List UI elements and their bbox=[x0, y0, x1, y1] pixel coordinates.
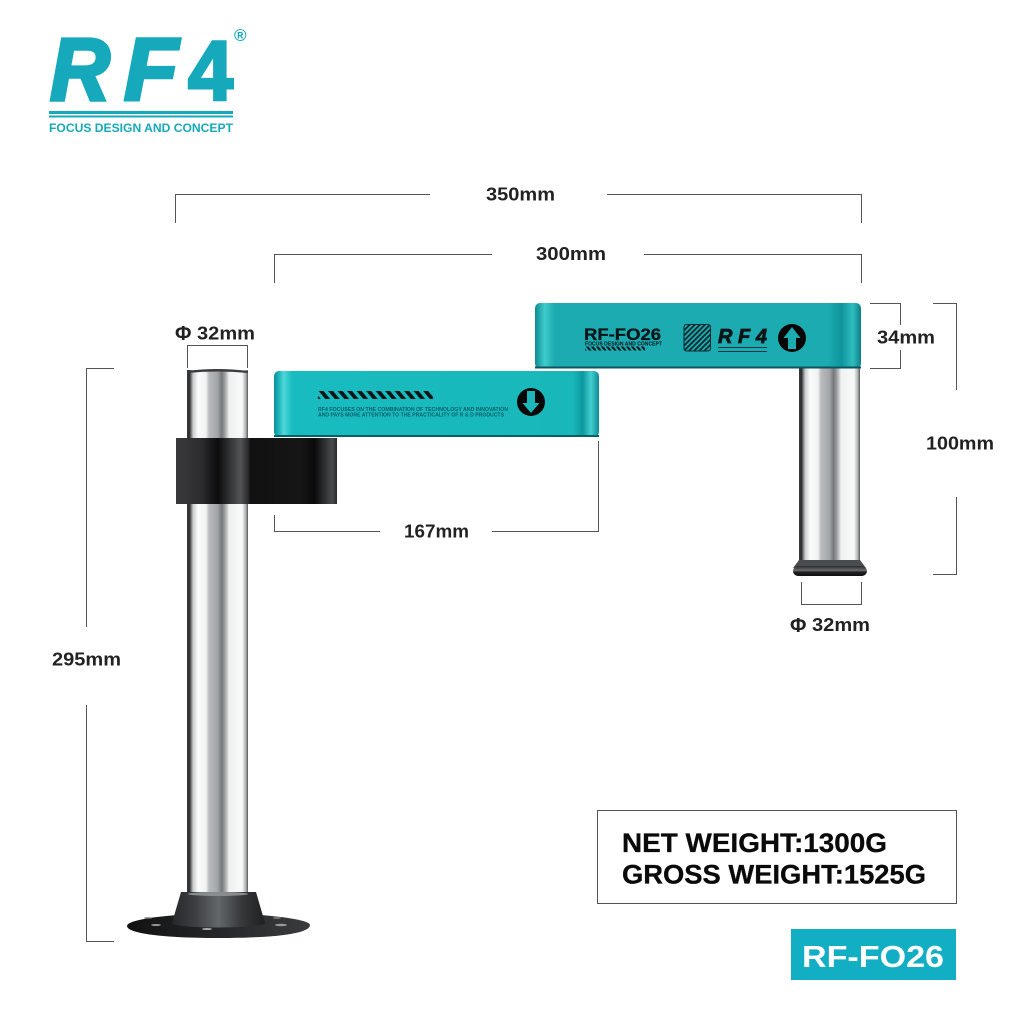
logo: RF4 bbox=[49, 20, 247, 135]
upper teal arm: FOCUS DESIGN AND CONCEPT bbox=[585, 342, 662, 348]
upper teal arm bbox=[535, 303, 861, 368]
logo: RF4: R bbox=[50, 20, 110, 119]
small RF4 logo: RF4 bbox=[718, 326, 767, 348]
dimension: bottom diameter 32mm bbox=[790, 582, 870, 637]
weight box: GROSS WEIGHT:1525G bbox=[622, 860, 926, 890]
dimension: 300mm bbox=[274, 244, 862, 283]
dimension: 167mm bbox=[274, 441, 598, 542]
dimension: 300mm: 300mm bbox=[536, 244, 606, 264]
icon: up arrow bbox=[778, 324, 806, 352]
weight box bbox=[598, 810, 956, 904]
dimension: top diameter 32mm bbox=[175, 323, 255, 368]
dimension: 295mm: 295mm bbox=[52, 650, 121, 670]
left pole bbox=[187, 369, 248, 895]
dimension: 350mm: 350mm bbox=[486, 184, 555, 204]
logo: RF4: 4 bbox=[188, 24, 233, 118]
dimension: bottom diameter 32mm: Φ bbox=[790, 615, 806, 637]
dimension: 350mm bbox=[176, 184, 862, 223]
hatched square bbox=[684, 324, 710, 351]
dimension: 34mm: 34mm bbox=[877, 328, 935, 348]
arm small text: RF4 FOCUSES ON THE COMBINATION OF TECHNOLOGY AND INNOVATION bbox=[318, 407, 508, 413]
logo: RF4: FOCUS DESIGN AND CONCEPT bbox=[49, 123, 233, 135]
right pole bbox=[793, 366, 866, 568]
dimension: top diameter 32mm: 32mm bbox=[197, 324, 255, 344]
model badge: RF-FO26 bbox=[802, 939, 944, 974]
lower teal arm bbox=[274, 371, 599, 437]
model name: RF-FO26 bbox=[584, 326, 661, 344]
dimension: 167mm: 167mm bbox=[404, 522, 469, 542]
dimension: top diameter 32mm: Φ bbox=[175, 323, 191, 345]
dimension: bottom diameter 32mm: 32mm bbox=[812, 615, 870, 635]
logo: RF4: F bbox=[124, 20, 180, 119]
registered mark: ® bbox=[234, 26, 247, 45]
base bbox=[127, 892, 310, 938]
weight box: NET WEIGHT:1300G bbox=[622, 828, 887, 858]
dimension: 295mm bbox=[52, 368, 121, 942]
icon: down arrow bbox=[517, 388, 545, 416]
model badge bbox=[791, 929, 956, 980]
dimension: 34mm bbox=[870, 304, 935, 368]
lower teal arm: AND PAYS MORE ATTENTION TO THE PRACTICALITY OF R & D PRODUCTS bbox=[318, 412, 504, 418]
right pole foot ring bbox=[793, 566, 867, 576]
clamp collar bbox=[176, 438, 337, 504]
hazard stripes bbox=[318, 391, 433, 399]
dimension: 100mm bbox=[926, 304, 994, 574]
dimension: 100mm: 100mm bbox=[926, 434, 994, 454]
